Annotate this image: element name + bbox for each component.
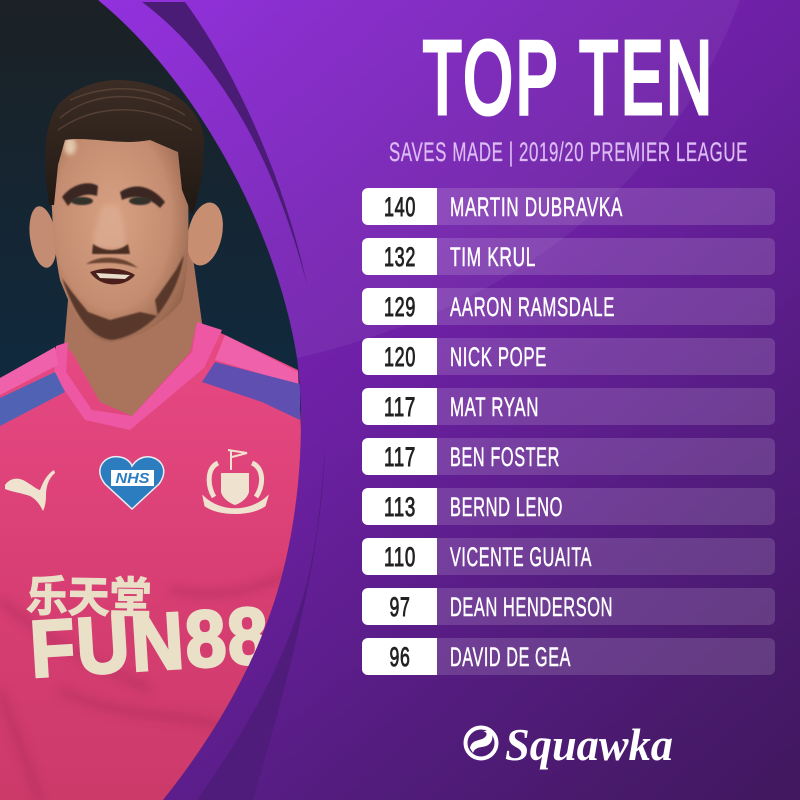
hair strands [58,89,192,130]
right ear [188,202,223,266]
jersey [0,322,320,800]
nose [93,205,125,248]
row 10: 96 [390,642,410,672]
row 5: 117 [384,392,416,422]
sponsor chinese text: 乐天堂 [26,573,152,623]
moustache and mouth [86,258,138,284]
row 4: 120 [384,342,416,372]
row 9 [362,588,775,625]
puma logo [5,470,55,511]
lower dark swoosh [197,447,325,800]
player photo [0,0,320,800]
row 6 [362,438,775,475]
row 3: AARON RAMSDALE [450,292,615,322]
upper shoulders [0,335,298,395]
row 5: MAT RYAN [450,392,539,422]
ranking table [362,188,775,675]
NHS heart badge [100,457,164,509]
row 2: 132 [384,242,416,272]
row 10 [362,638,775,675]
row 7: 113 [384,492,416,522]
row 7: BERND LENO [450,492,563,522]
face [51,129,188,342]
beard [62,255,184,340]
wordmark: Squawka [505,719,673,770]
icon: Squawka mark [466,728,496,758]
row 1: MARTIN DUBRAVKA [450,192,623,222]
row 3: 129 [384,292,416,322]
eyes [71,197,151,205]
row 9: 97 [390,592,410,622]
row 7 [362,488,775,525]
right eyebrow [120,187,165,208]
left ear [29,206,56,268]
row 2 [362,238,775,275]
row 3 [362,288,775,325]
row 6: 117 [384,442,416,472]
row 1 [362,188,775,225]
nose shadow [92,244,130,254]
lighter arc overlay [100,0,740,400]
row 1: 140 [384,192,416,222]
forehead highlight [64,137,76,155]
row 10: DAVID DE GEA [450,642,571,672]
row 8 [362,538,775,575]
row 2: TIM KRUL [450,242,536,272]
Squawka logo [466,719,673,770]
sponsor FUN88 text: FUN88 [28,590,273,694]
row 9: DEAN HENDERSON [450,592,613,622]
left eyebrow [62,183,98,206]
collar [54,322,222,430]
row 5 [362,388,775,425]
Newcastle crest [203,450,268,514]
row 8: 110 [384,542,416,572]
upper dark swoosh [142,2,307,285]
row 4: NICK POPE [450,342,547,372]
hair [45,80,204,215]
jersey folds [0,570,295,800]
row 4 [362,338,775,375]
neck [62,250,205,418]
sleeve stripe left [0,372,65,426]
row 8: VICENTE GUAITA [450,542,592,572]
row 6: BEN FOSTER [450,442,560,472]
photo background [0,0,320,800]
NHS heart badge: NHS [116,471,150,487]
sleeve stripe right [202,362,300,420]
